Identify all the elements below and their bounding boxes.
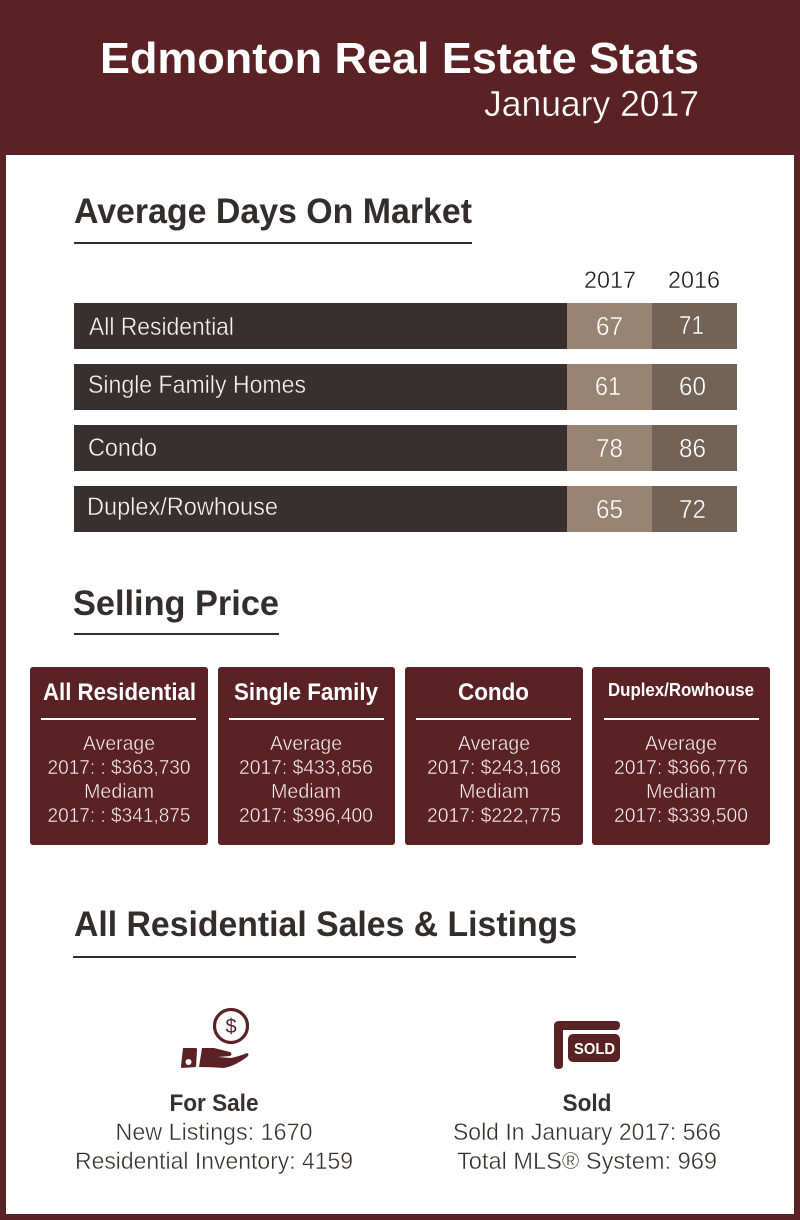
text block: for sale xyxy=(75,1090,353,1175)
row: duplex/rowhouse: 65 xyxy=(596,494,623,524)
panel: condo price: Mediam xyxy=(459,781,529,803)
panel: condo price: Condo xyxy=(458,679,529,706)
column headers xyxy=(584,267,720,294)
panel: single family price: Mediam xyxy=(271,781,341,803)
panel: single family price: Single Family xyxy=(234,679,379,706)
text block: sold: Sold In January 2017: 566 xyxy=(453,1119,721,1146)
row: condo xyxy=(74,425,737,471)
text block: sold: Total MLS® System: 969 xyxy=(457,1148,717,1175)
title: Edmonton Real Estate Stats xyxy=(100,34,699,83)
row: single family homes: Single Family Homes xyxy=(88,371,306,399)
panel: all residential price: Average xyxy=(83,733,155,755)
text block: for sale: For Sale xyxy=(170,1090,258,1117)
icon: sold sign: SOLD xyxy=(574,1041,615,1058)
row: condo: Condo xyxy=(88,434,157,462)
row: single family homes: 60 xyxy=(679,371,706,401)
panel: all residential price xyxy=(30,667,208,845)
panel: duplex/rowhouse price: Duplex/Rowhouse xyxy=(608,680,754,700)
panel: single family price xyxy=(218,667,395,845)
icon: hand holding coin xyxy=(181,1010,248,1068)
panel: duplex/rowhouse price: Average xyxy=(645,733,717,755)
panel: all residential price: Mediam xyxy=(84,781,154,803)
icon: sold sign xyxy=(554,1021,620,1069)
row: single family homes xyxy=(74,364,737,410)
panel: duplex/rowhouse price: 2017: $339,500 xyxy=(614,805,748,827)
text block: for sale: Residential Inventory: 4159 xyxy=(75,1148,353,1175)
panel: duplex/rowhouse price xyxy=(592,667,770,845)
panel: condo price: 2017: $222,775 xyxy=(427,805,561,827)
panel: single family price: 2017: $396,400 xyxy=(239,805,373,827)
row: all residential: 71 xyxy=(679,310,704,340)
panel: duplex/rowhouse price: Mediam xyxy=(646,781,716,803)
icon: hand holding coin: $ xyxy=(225,1016,237,1038)
panel: single family price: Average xyxy=(270,733,342,755)
text block: for sale: New Listings: 1670 xyxy=(116,1119,312,1146)
heading: all residential sales and listings: All Residential Sales & Listings xyxy=(74,905,577,944)
row: all residential xyxy=(74,303,737,349)
panel: all residential price: All Residential xyxy=(43,679,196,706)
panel: duplex/rowhouse price: 2017: $366,776 xyxy=(614,757,748,779)
table: days on market xyxy=(74,267,737,532)
panel: single family price: 2017: $433,856 xyxy=(239,757,373,779)
row: duplex/rowhouse: Duplex/Rowhouse xyxy=(87,493,278,521)
title: January 2017 xyxy=(484,83,699,124)
panel: all residential price: 2017: : $363,730 xyxy=(48,757,190,779)
row: condo: 78 xyxy=(596,433,623,463)
column headers: 2017 xyxy=(584,267,636,294)
title xyxy=(100,34,699,124)
heading: average days on market: Average Days On Market xyxy=(74,192,472,231)
row: duplex/rowhouse xyxy=(74,486,737,532)
heading: selling price: Selling Price xyxy=(73,584,279,623)
text block: sold: Sold xyxy=(562,1090,612,1117)
panel: condo price: 2017: $243,168 xyxy=(427,757,561,779)
panel: condo price xyxy=(405,667,583,845)
row: all residential: 67 xyxy=(596,311,623,341)
panel: all residential price: 2017: : $341,875 xyxy=(48,805,190,827)
panel: condo price: Average xyxy=(458,733,530,755)
row: single family homes: 61 xyxy=(595,371,621,401)
text block: sold xyxy=(453,1090,721,1175)
row: all residential: All Residential xyxy=(89,313,234,341)
column headers: 2016 xyxy=(668,267,720,294)
row: duplex/rowhouse: 72 xyxy=(679,494,706,524)
row: condo: 86 xyxy=(679,433,706,463)
